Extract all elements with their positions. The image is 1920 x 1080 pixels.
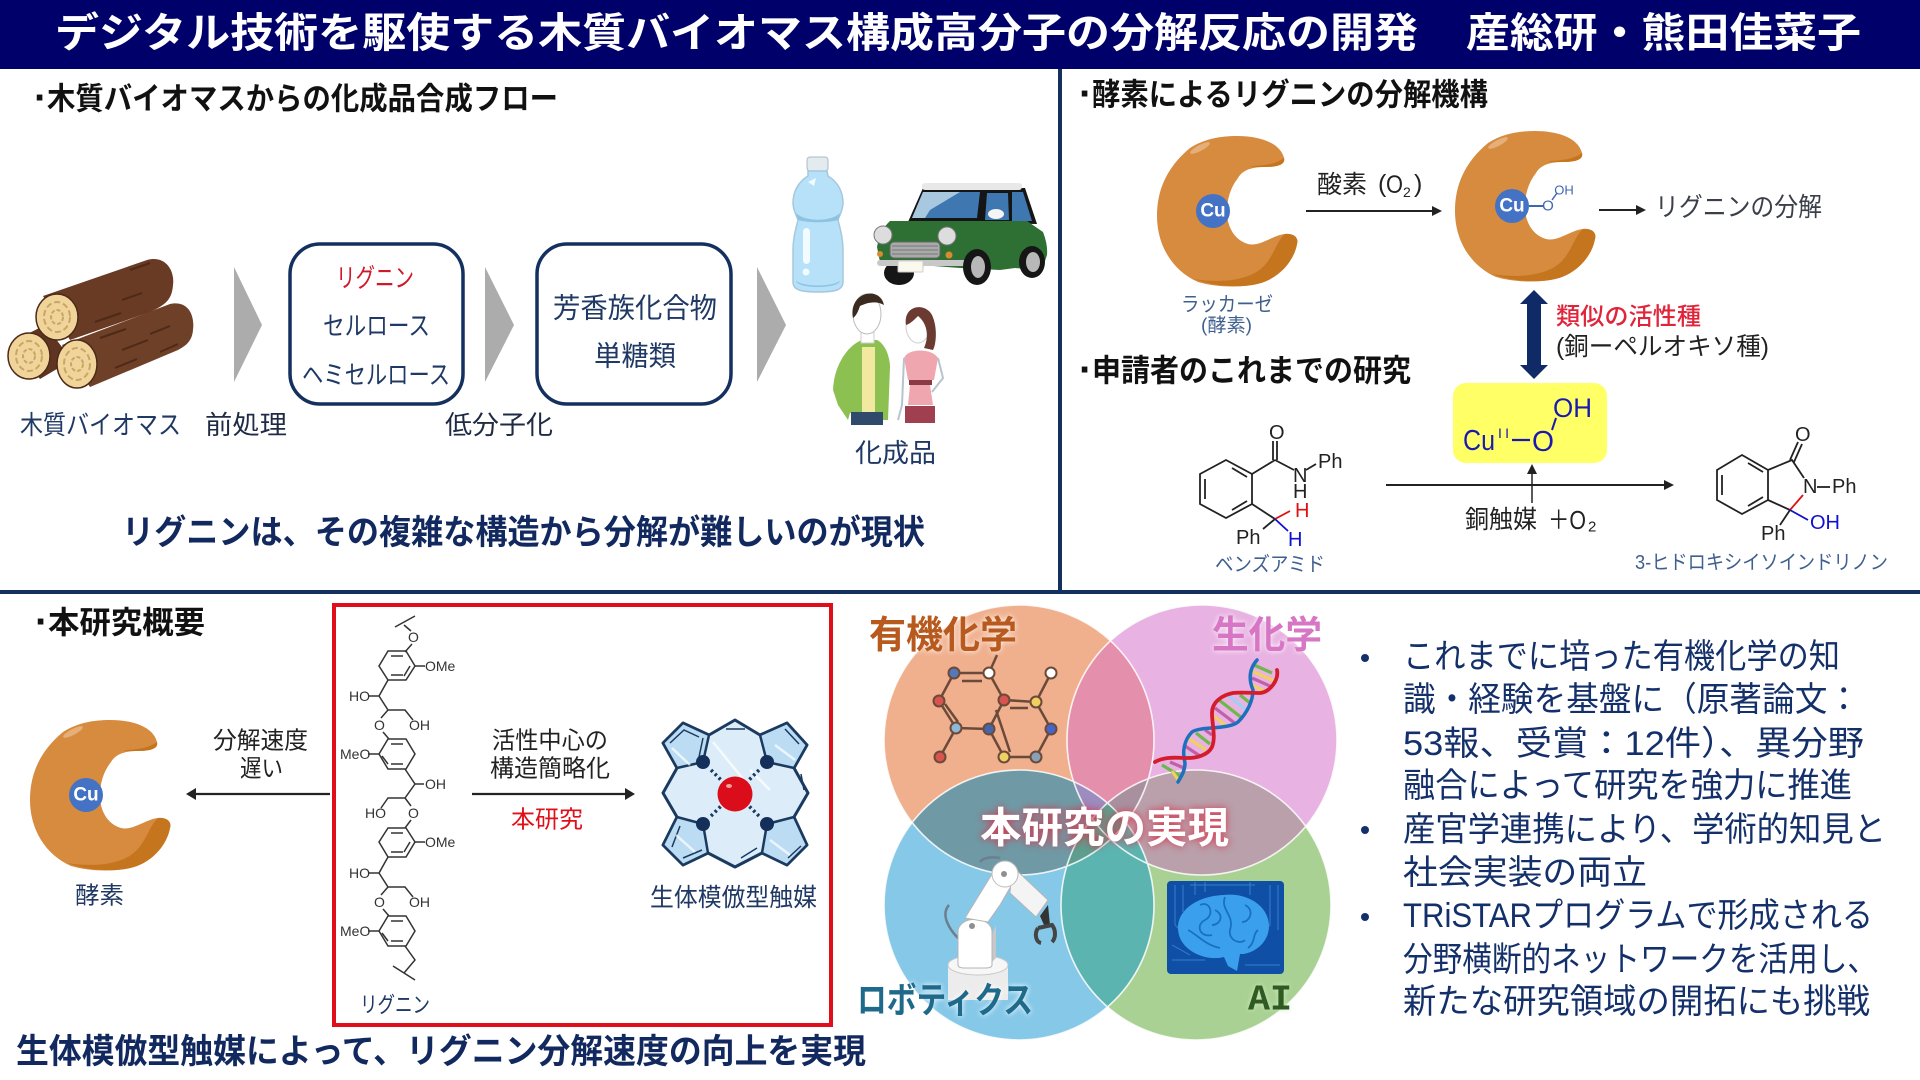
flow labels: 木質バイオマス <box>20 410 181 440</box>
text block: summary bullets: TRiSTARプログラムで形成される <box>1403 897 1873 935</box>
label: similar active species: 類似の活性種 <box>1556 304 1701 330</box>
heading dot: previous research: · <box>1079 348 1092 392</box>
text block: summary bullets: 産官学連携により、学術的知見と <box>1403 811 1886 849</box>
label: benzamide: ベンズアミド <box>1215 553 1325 576</box>
callout: Cu peroxo species: II <box>1498 425 1509 441</box>
label: simplification: 本研究 <box>511 806 583 834</box>
label: laccase: (酵素) <box>1201 314 1252 336</box>
chart: benzamide structure <box>1200 422 1342 551</box>
callout: Cu peroxo species <box>1453 383 1607 463</box>
heading: previous research: 申請者のこれまでの研究 <box>1092 354 1411 388</box>
label: simplification <box>490 728 610 834</box>
icon: peroxo enzyme: Cu <box>1499 196 1525 216</box>
panel: biomass flow <box>8 76 1047 552</box>
chart: hydroxyisoindolinone structure <box>1717 424 1856 545</box>
label: organic chemistry: 有機化学 <box>869 615 1017 657</box>
box: products: 芳香族化合物 <box>553 292 717 324</box>
heading dot: overview: · <box>35 600 48 644</box>
label: oxygen: O <box>1386 171 1403 199</box>
arrow: depolymerization <box>485 267 514 382</box>
text: lignin groups: O <box>408 629 419 645</box>
callout: Cu peroxo species: Cu <box>1463 425 1495 457</box>
label: lignin: リグニン <box>360 992 430 1018</box>
icon: laccase <box>1157 136 1297 286</box>
title bar: 産総研・熊田佳菜子 <box>1466 10 1861 56</box>
text: product atoms: Ph <box>1832 476 1856 498</box>
icon: peroxo enzyme: O <box>1542 198 1554 214</box>
icon: DNA <box>1155 660 1277 782</box>
text block: summary bullets <box>1361 638 1886 1021</box>
callout: Cu peroxo species: O <box>1532 426 1554 458</box>
arrow: slow rate <box>186 788 330 800</box>
text: product atoms: Ph <box>1761 523 1785 545</box>
icon: logs <box>8 259 193 388</box>
label: similar active species <box>1556 304 1769 361</box>
arrow: reaction <box>1386 480 1674 490</box>
flow labels: 低分子化 <box>445 410 553 440</box>
label: robotics: ロボティクス <box>857 980 1033 1020</box>
icon: car <box>874 183 1047 285</box>
text: lignin groups: O <box>374 894 385 910</box>
flow labels <box>20 410 936 468</box>
icon: laccase: Cu <box>1200 200 1226 222</box>
heading text: flow: 木質バイオマスからの化成品合成フロー <box>47 82 558 116</box>
label: catalyst: 2 <box>1588 518 1596 536</box>
text: lignin groups: HO <box>349 688 370 704</box>
chart: lignin structure <box>340 616 456 980</box>
box: polymers: リグニン <box>336 263 414 293</box>
text: lignin groups: HO <box>365 805 386 821</box>
label: biochemistry: 生化学 <box>1212 615 1322 657</box>
label: oxygen: ) <box>1414 170 1422 198</box>
arrow: oxygen reaction <box>1306 206 1442 216</box>
label: oxygen: 酸素 <box>1317 171 1367 199</box>
text: product atoms: OH <box>1810 512 1840 534</box>
text: lignin groups: OMe <box>425 834 456 850</box>
callout: Cu peroxo species: OH <box>1553 393 1592 423</box>
text block: summary bullets: 53報、受賞：12件）、異分野 <box>1403 725 1864 763</box>
icon: enzyme: Cu <box>73 784 99 806</box>
title bar: デジタル技術を駆使する木質バイオマス構成高分子の分解反応の開発 <box>55 10 1418 56</box>
icon: robot arm <box>945 857 1055 1000</box>
label: realization: 本研究の実現 <box>980 804 1229 852</box>
chart: venn diagram <box>857 605 1337 1040</box>
text block: summary bullets: 社会実装の両立 <box>1403 854 1647 892</box>
heading dot: flow: · <box>34 76 47 120</box>
arrow: simplification <box>472 788 635 800</box>
text: lignin groups: MeO <box>340 923 370 939</box>
label: product: 3-ヒドロキシイソインドリノン <box>1635 552 1888 574</box>
label: lignin decomposition: リグニンの分解 <box>1655 192 1822 222</box>
label: catalyst: 銅触媒 <box>1465 506 1537 534</box>
callout: lignin difficulty: リグニンは、その複雑な構造から分解が難しいのが現状 <box>122 513 925 552</box>
label: slow rate: 遅い <box>240 756 283 782</box>
panel: enzyme mechanism <box>1079 72 1888 576</box>
label: oxygen: 2 <box>1403 184 1411 200</box>
label: simplification: 活性中心の <box>492 728 608 754</box>
text: lignin groups: OH <box>409 894 430 910</box>
text block: summary bullets: 新たな研究領域の開拓にも挑戦 <box>1403 983 1870 1021</box>
arrow: pretreatment <box>234 267 262 382</box>
heading: enzyme mechanism: 酵素によるリグニンの分解機構 <box>1092 78 1488 112</box>
arrow: synthesis <box>757 267 786 382</box>
callout: rate improvement: 生体模倣型触媒によって、リグニン分解速度の向上を実現 <box>16 1033 866 1071</box>
label: biomimetic catalyst: 生体模倣型触媒 <box>650 884 817 912</box>
label: slow rate: 分解速度 <box>213 728 308 754</box>
text: benzamide atoms: O <box>1269 422 1285 444</box>
label: similar active species: (銅ーペルオキソ種) <box>1556 333 1769 361</box>
box: products <box>537 244 731 404</box>
panel: research overview <box>16 600 866 1071</box>
text: lignin groups: OH <box>425 776 446 792</box>
text: lignin groups: OH <box>409 717 430 733</box>
text: lignin groups: OMe <box>425 658 456 674</box>
text: benzamide atoms: Ph <box>1318 451 1342 473</box>
text: lignin groups <box>340 629 456 939</box>
box: polymers <box>290 244 463 404</box>
icon: enzyme <box>30 720 170 870</box>
text block: summary bullets: 融合によって研究を強力に推進 <box>1403 767 1852 805</box>
box: polymers: セルロース <box>323 311 430 341</box>
label: laccase <box>1181 293 1273 336</box>
text: lignin groups: O <box>374 717 385 733</box>
arrow: similarity <box>1520 290 1548 379</box>
label: laccase: ラッカーゼ <box>1181 293 1273 316</box>
arrow: to lignin decomposition <box>1599 205 1646 215</box>
icon: bottle <box>793 157 843 292</box>
title bar <box>0 0 1920 69</box>
text: benzamide atoms: H <box>1288 529 1302 551</box>
arrow: catalyst up <box>1527 464 1537 503</box>
panel: red frame <box>334 605 831 1025</box>
label: simplification: 構造簡略化 <box>490 756 610 782</box>
flow labels: 前処理 <box>205 410 287 440</box>
text block: summary bullets: これまでに培った有機化学の知 <box>1403 638 1840 676</box>
label: slow rate <box>213 728 308 782</box>
label: catalyst <box>1465 505 1596 536</box>
heading: overview: 本研究概要 <box>48 606 205 640</box>
text: lignin groups: MeO <box>340 746 370 762</box>
label: oxygen <box>1317 170 1422 200</box>
text: lignin groups: HO <box>349 865 370 881</box>
icon: peroxo enzyme <box>1455 131 1595 282</box>
icon: biomimetic catalyst <box>663 720 808 867</box>
text: benzamide atoms: H <box>1295 500 1309 522</box>
text: benzamide atoms: N <box>1293 465 1307 487</box>
icon: peroxo enzyme: OH <box>1554 182 1574 198</box>
text: product atoms <box>1761 424 1856 545</box>
box: polymers: ヘミセルロース <box>302 360 450 390</box>
box: products: 単糖類 <box>594 340 676 372</box>
heading dot: enzyme mechanism: · <box>1079 72 1092 116</box>
label: oxygen: ( <box>1378 170 1387 198</box>
text: benzamide atoms <box>1236 422 1342 551</box>
icon: people <box>833 293 943 425</box>
label: AI: AI <box>1248 980 1292 1020</box>
text: product atoms: O <box>1795 424 1811 446</box>
text: product atoms: N <box>1803 476 1817 498</box>
icon: AI brain <box>1167 881 1284 974</box>
label: enzyme: 酵素 <box>75 882 124 910</box>
flow labels: 化成品 <box>855 438 936 468</box>
label: catalyst: ＋O <box>1548 505 1586 535</box>
text block: summary bullets: 識・経験を基盤に（原著論文： <box>1403 681 1860 719</box>
text: benzamide atoms: H <box>1293 481 1307 503</box>
text: benzamide atoms: Ph <box>1236 527 1260 549</box>
text: lignin groups: O <box>408 805 419 821</box>
icon: molecule <box>934 655 1056 762</box>
